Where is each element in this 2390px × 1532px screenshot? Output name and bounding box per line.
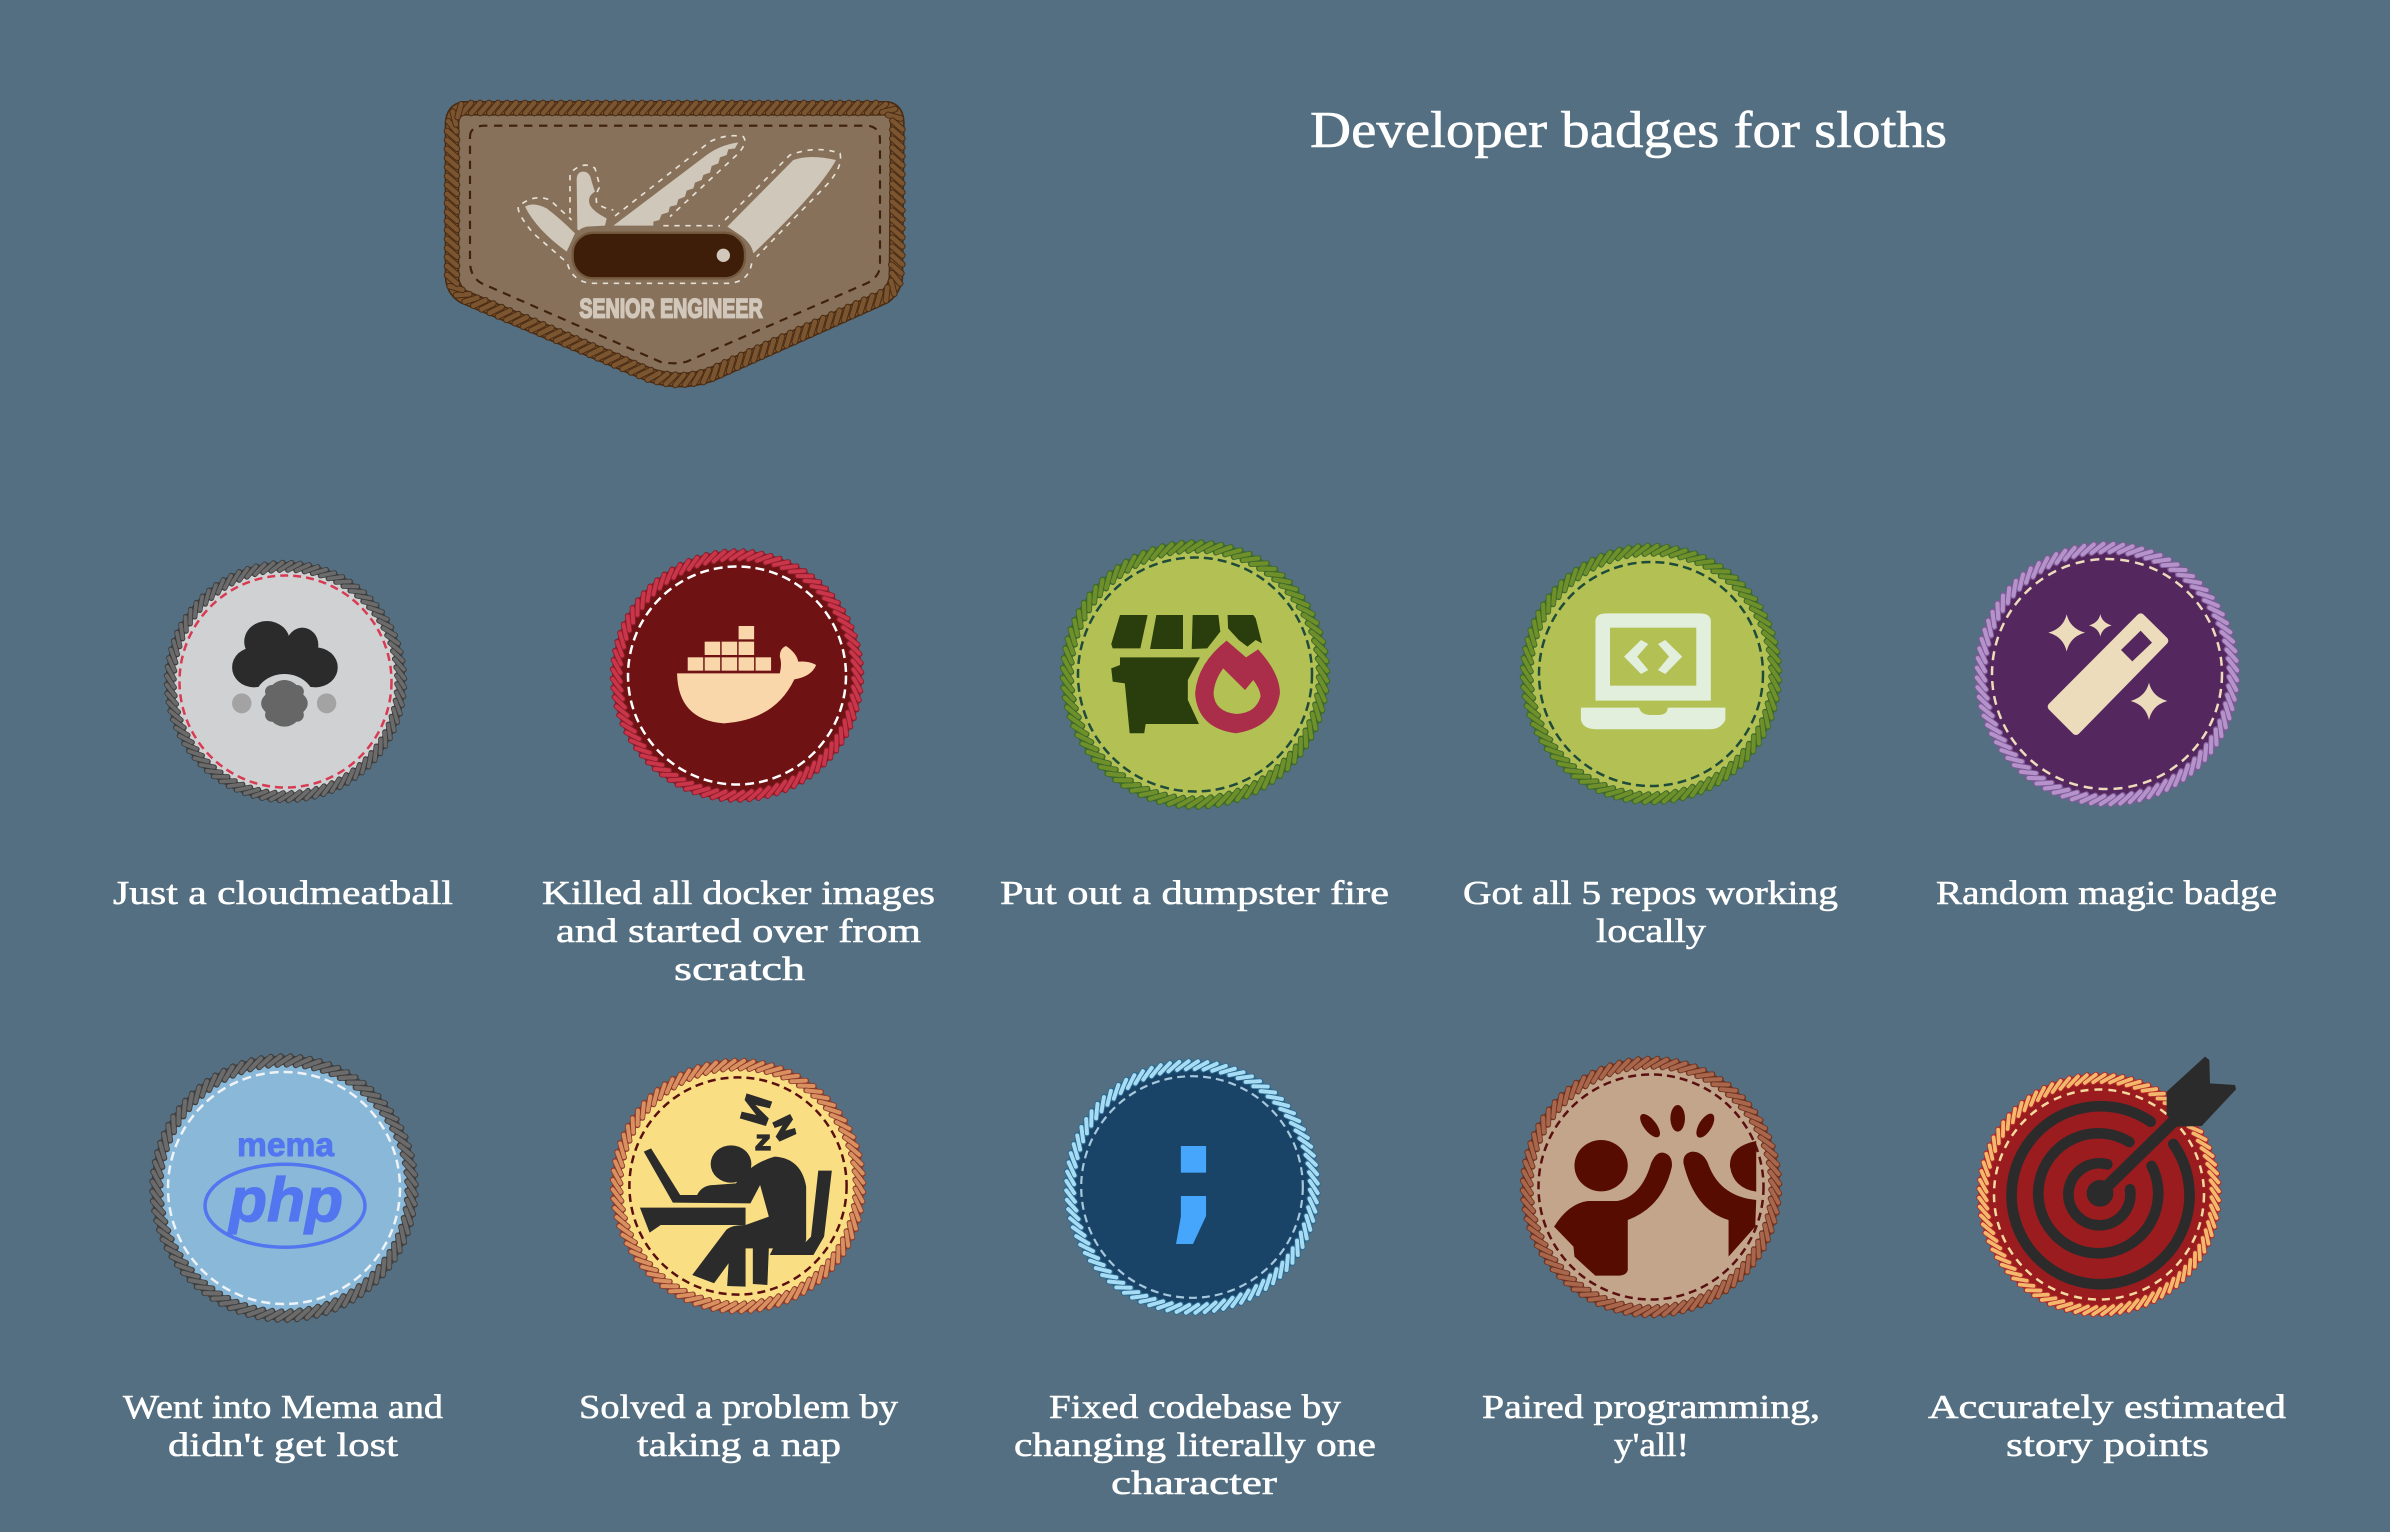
- label: semicolon: character: [1111, 1465, 1278, 1502]
- badge text: SENIOR ENGINEER: [579, 293, 763, 323]
- label: repos: [1463, 875, 1838, 950]
- icon: two people high-fiving: [1554, 1105, 1756, 1276]
- label: magic: Random magic badge: [1936, 875, 2277, 912]
- label: mema: Went into Mema and: [123, 1389, 443, 1426]
- badge: semicolon: [1064, 1059, 1320, 1315]
- badge: mema php: [150, 1054, 418, 1322]
- icon: dumpster with flame: [1111, 615, 1280, 733]
- stitching: [470, 126, 880, 363]
- label: docker: and started over from: [556, 913, 921, 950]
- label: repos: locally: [1596, 913, 1706, 950]
- label: mema: [123, 1389, 443, 1464]
- icon: laptop with code: [1581, 613, 1725, 729]
- icon: target with arrow: [2012, 1057, 2236, 1284]
- badge: high five: [1520, 1056, 1782, 1318]
- title: Developer badges for sloths: [1310, 102, 1947, 159]
- label: nap: Solved a problem by: [579, 1389, 898, 1426]
- label: estimates: Accurately estimated: [1928, 1389, 2286, 1426]
- label: docker: Killed all docker images: [542, 875, 935, 912]
- label: estimates: [1928, 1389, 2286, 1464]
- patch body: [452, 108, 897, 380]
- icon: php logo: mema: [237, 1126, 335, 1163]
- label: mema: didn't get lost: [168, 1427, 399, 1464]
- icon: semicolon: [1176, 1146, 1206, 1244]
- label: semicolon: [1014, 1389, 1376, 1502]
- icon: php logo: php: [227, 1166, 343, 1235]
- label: pairing: Paired programming,: [1482, 1389, 1820, 1426]
- badge: laptop repos: [1520, 543, 1782, 805]
- label: pairing: y'all!: [1614, 1427, 1689, 1464]
- icon: magic wand and stars: [2048, 614, 2167, 731]
- icon: php logo: [205, 1126, 365, 1247]
- label: cloudmeatball: Just a cloudmeatball: [113, 875, 453, 912]
- badge: random magic: [1974, 541, 2240, 807]
- icon: sleeping developer: [640, 1093, 832, 1287]
- icon: pocket knife: [518, 136, 841, 283]
- badge: dumpster fire: [1060, 540, 1330, 809]
- label: semicolon: changing literally one: [1014, 1427, 1376, 1464]
- label: docker: [542, 875, 935, 988]
- badge: target: [1977, 1057, 2236, 1317]
- label: nap: taking a nap: [637, 1427, 841, 1464]
- label: dumpster fire: Put out a dumpster fire: [1000, 875, 1389, 912]
- badge: senior engineer patch: [447, 103, 902, 385]
- badge: nap: [610, 1058, 866, 1314]
- label: pairing: [1482, 1389, 1820, 1464]
- label: estimates: story points: [2006, 1427, 2209, 1464]
- label: semicolon: Fixed codebase by: [1049, 1389, 1341, 1426]
- label: docker: scratch: [674, 951, 805, 988]
- badge: cloudmeatball: [164, 560, 407, 803]
- label: nap: [579, 1389, 898, 1464]
- icon: cloud and meatball: [232, 621, 338, 727]
- label: repos: Got all 5 repos working: [1463, 875, 1838, 912]
- icon: docker whale: [677, 626, 816, 723]
- rope border: [447, 103, 902, 385]
- badge: docker: [610, 549, 864, 802]
